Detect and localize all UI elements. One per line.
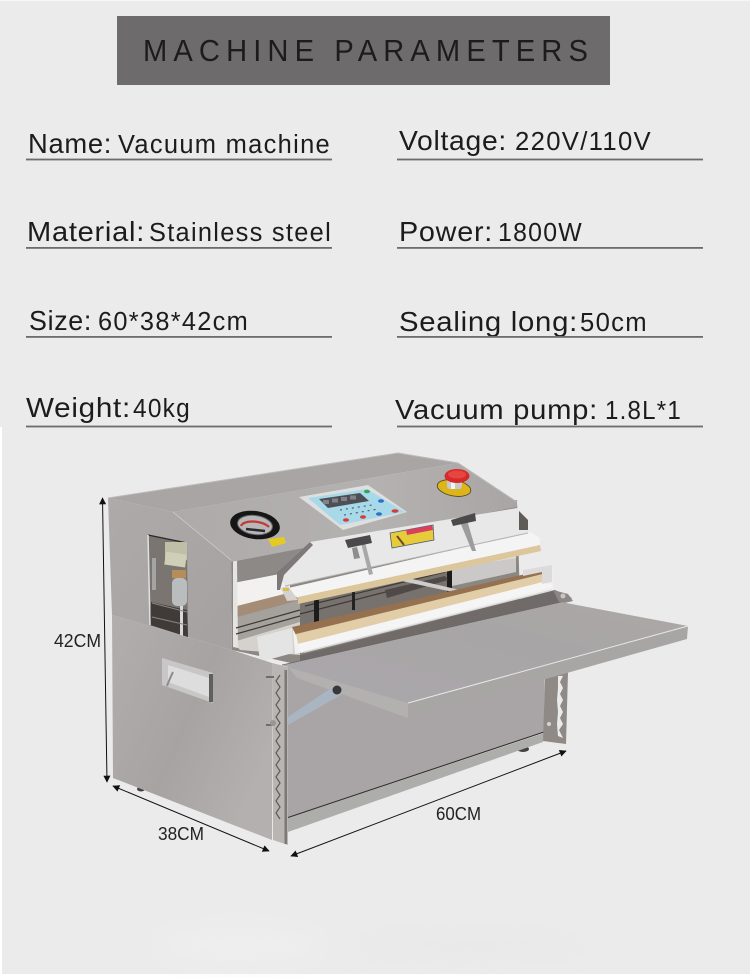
upper sealing bar [277, 508, 541, 604]
parameter: name: Vacuum machine [118, 131, 331, 159]
parameter: voltage: 220V/110V [515, 128, 652, 156]
dimension: height 42CM [54, 498, 107, 782]
lower sealing bar [292, 565, 573, 664]
warning label [390, 525, 434, 548]
fold-down shelf [282, 602, 688, 718]
machine feet [137, 746, 529, 792]
dimension: height 42CM: 42CM [54, 631, 101, 651]
right rack post [543, 672, 568, 744]
emergency stop button [436, 469, 472, 499]
parameter: name: Name: [28, 128, 112, 159]
clamp knobs [345, 513, 476, 575]
carry handle [162, 658, 213, 703]
interior opening [231, 500, 520, 665]
side window with air filter [148, 535, 188, 637]
parameter: weight: Weight: [26, 392, 131, 423]
parameter: weight [26, 392, 332, 427]
parameter: voltage: Voltage: [399, 125, 507, 156]
parameter: sealing long: 50cm [580, 309, 648, 337]
parameter: power: 1800W [498, 219, 583, 247]
dimension: width 60CM [291, 751, 566, 856]
parameter: name [26, 128, 332, 160]
left rack post [266, 663, 288, 845]
dimension: width 60CM: 60CM [436, 804, 481, 824]
lower front panel [288, 640, 545, 832]
parameter: vacuum pump: 1.8L*1 [605, 397, 682, 425]
parameter: weight: 40kg [133, 395, 191, 423]
parameter: size: Size: [29, 305, 92, 336]
shelf support arm [270, 684, 342, 726]
parameter: material: Stainless steel [149, 219, 332, 247]
parameter: size: 60*38*42cm [98, 308, 249, 336]
dimension: depth 38CM [113, 786, 269, 851]
title banner [117, 16, 610, 85]
control panel [299, 485, 407, 530]
parameter: voltage [397, 125, 703, 160]
upper lid [108, 453, 517, 650]
parameter: sealing long [397, 306, 703, 338]
parameter: material: Material: [27, 216, 145, 247]
lower side panel [112, 615, 272, 840]
dimension: depth 38CM: 38CM [158, 824, 204, 844]
parameter: vacuum pump [395, 394, 703, 427]
parameter: sealing long: Sealing long: [399, 306, 578, 337]
parameter: power: Power: [399, 216, 493, 247]
white end block [257, 628, 293, 662]
floor reflection [155, 927, 590, 963]
parameter: vacuum pump: Vacuum pump: [395, 394, 598, 425]
pressure gauge [228, 508, 286, 547]
parameter: material [26, 216, 332, 249]
parameter: size [26, 305, 332, 338]
parameter: power [397, 216, 703, 249]
vacuum machine illustration [108, 453, 688, 845]
title banner: MACHINE PARAMETERS [143, 33, 594, 68]
